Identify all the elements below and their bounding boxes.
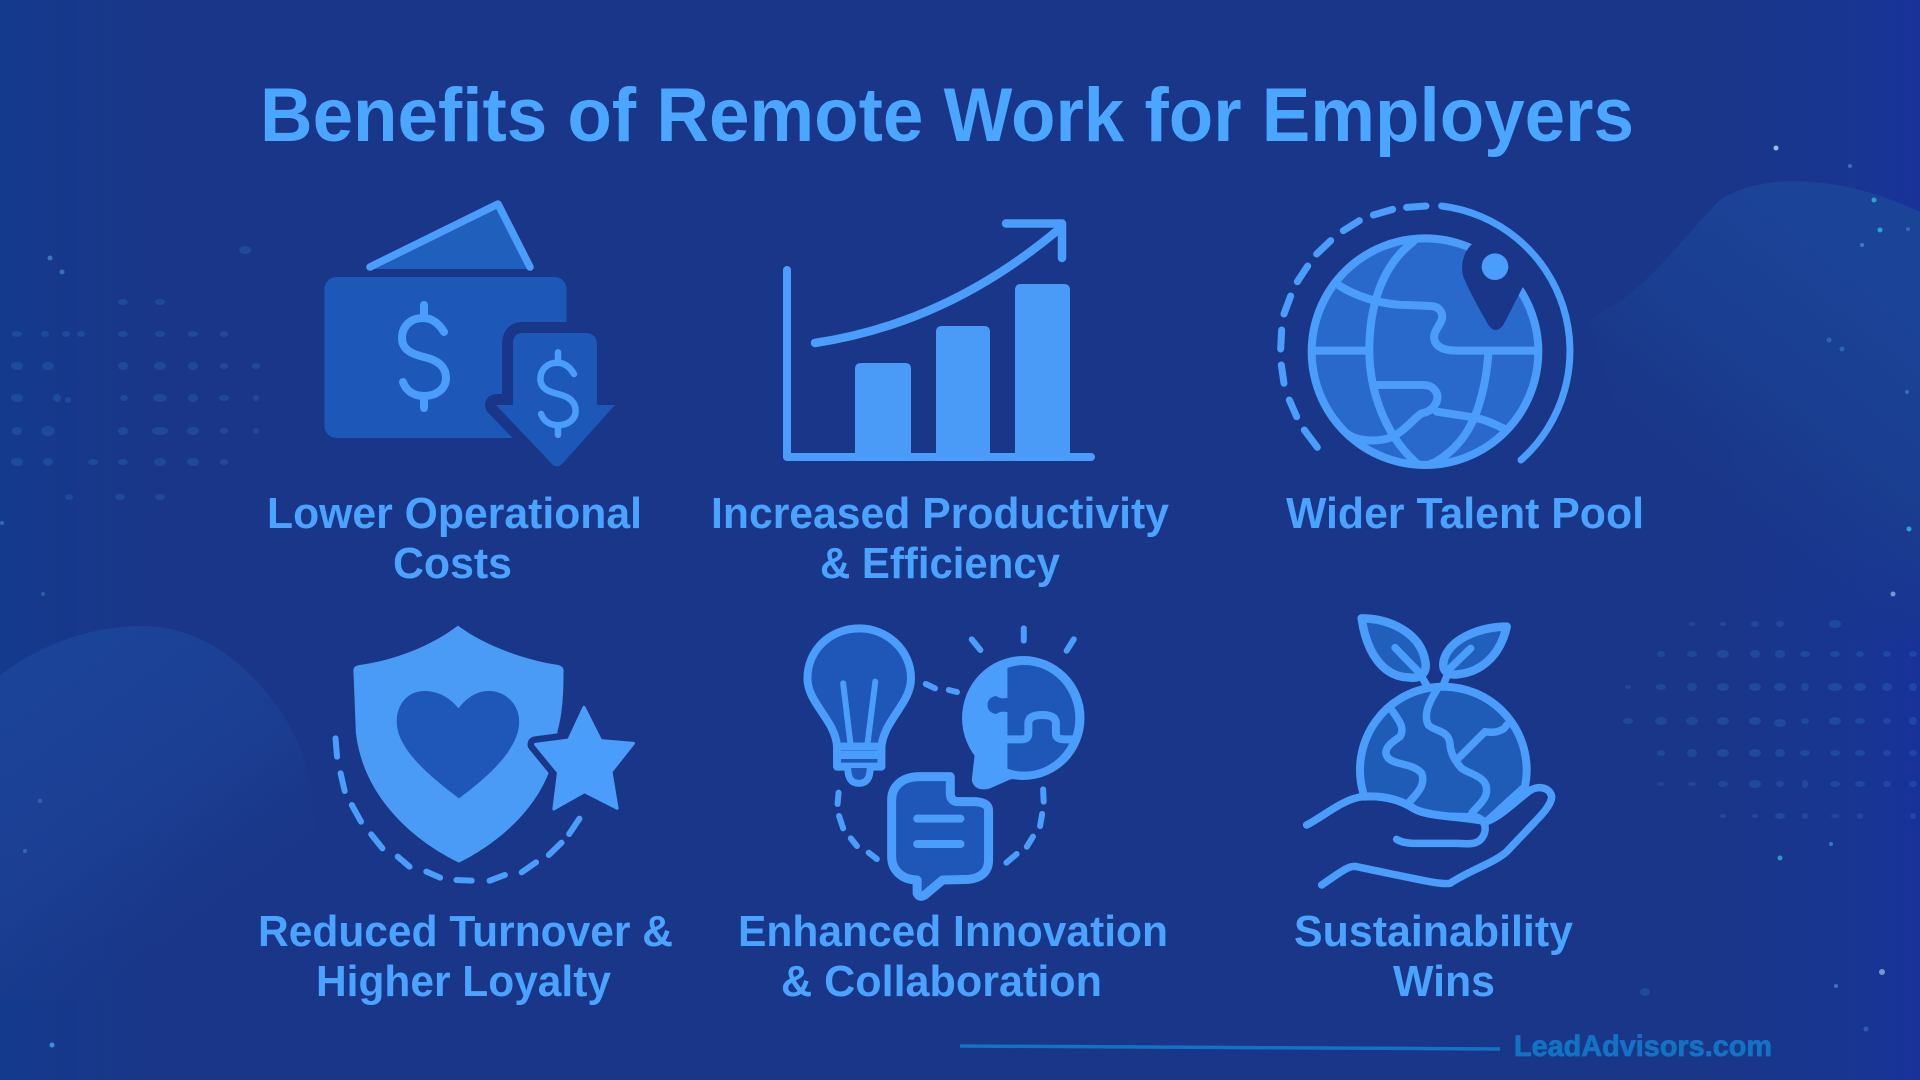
icon: bar chart with rising arrow: [787, 224, 1091, 457]
title: Benefits of Remote Work for Employers: [260, 73, 1634, 158]
benefit: increased productivity: [711, 224, 1170, 588]
label: increased productivity and efficiency: & Efficiency: [820, 539, 1060, 588]
footer brand: [960, 1030, 1772, 1063]
label: lower operational costs: Costs: [393, 539, 512, 588]
icon: hand holding globe with sprout: [1307, 618, 1552, 885]
label: reduced turnover and higher loyalty: Reduced Turnover &: [258, 907, 673, 956]
label: lower operational costs: [267, 489, 642, 588]
label: reduced turnover and higher loyalty: Higher Loyalty: [316, 957, 612, 1006]
chat bubble: [892, 777, 989, 896]
label: sustainability wins: [1294, 907, 1574, 1006]
icon: light bulb, puzzle head and chat bubble: [807, 628, 1084, 896]
label: increased productivity and efficiency: Increased Productivity: [711, 489, 1170, 538]
label: enhanced innovation and collaboration: & Collaboration: [781, 957, 1102, 1006]
benefit: reduced turnover: [258, 626, 673, 1006]
label: sustainability wins: Sustainability: [1294, 907, 1574, 956]
light bulb: [807, 628, 911, 783]
icon: shield with heart and star: [336, 626, 633, 881]
icon: globe with location pin: [1281, 206, 1570, 466]
benefit: enhanced innovation: [738, 628, 1168, 1006]
label: increased productivity and efficiency: [711, 489, 1170, 588]
label: wider talent pool: Wider Talent Pool: [1286, 489, 1644, 538]
benefit: lower operational costs: [267, 202, 642, 588]
footer brand: LeadAdvisors.com: [1514, 1030, 1772, 1063]
label: sustainability wins: Wins: [1393, 957, 1495, 1006]
benefit: wider talent pool: [1281, 206, 1644, 538]
icon: wallet with dollar and down arrow: [324, 202, 615, 468]
benefit: sustainability wins: [1294, 618, 1574, 1006]
puzzle head: [962, 656, 1084, 788]
label: enhanced innovation and collaboration: [738, 907, 1168, 1006]
label: reduced turnover and higher loyalty: [258, 907, 673, 1006]
label: enhanced innovation and collaboration: Enhanced Innovation: [738, 907, 1168, 956]
label: lower operational costs: Lower Operational: [267, 489, 642, 538]
